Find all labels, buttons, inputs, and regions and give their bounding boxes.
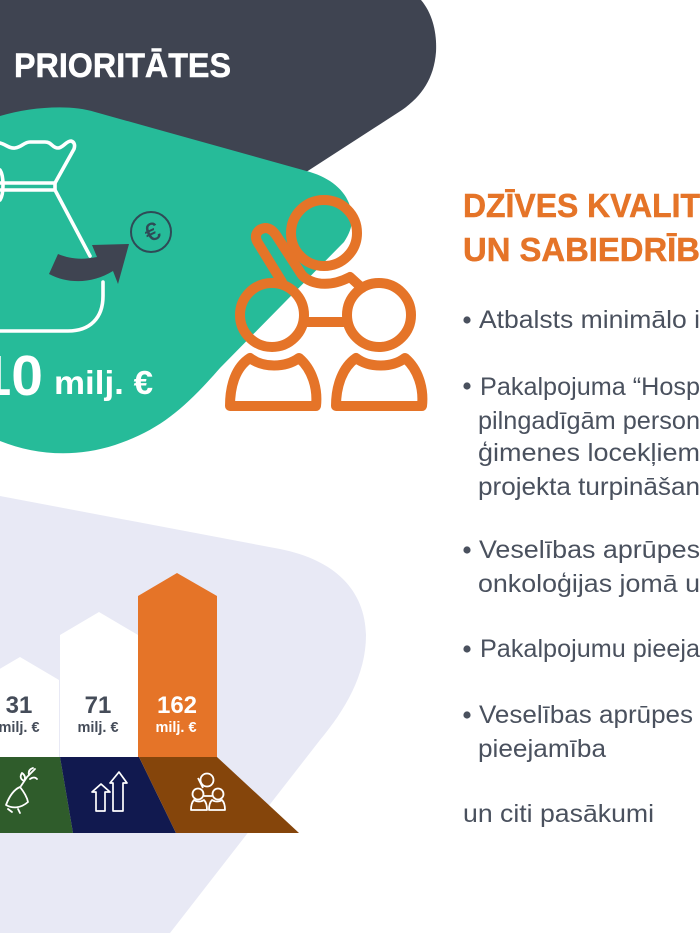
bar: 162 milj. €: milj. €	[155, 720, 197, 736]
bullet list: projekta turpināšan	[478, 473, 700, 501]
icon: euro coin	[131, 212, 171, 252]
bar: 162 milj. €: 162	[157, 692, 197, 719]
bullet list: un citi pasākumi	[463, 800, 654, 828]
bullet list: ģimenes locekļiem	[478, 439, 700, 467]
bullet list: Pakalpojuma “Hosp	[480, 373, 700, 401]
funding amount	[0, 344, 153, 408]
bar: 31 milj. €: 31	[6, 692, 32, 719]
base segment: brown with people icon	[139, 757, 299, 833]
panel: lavender chart background	[0, 496, 366, 933]
bullet list: Atbalsts minimālo i	[479, 306, 700, 334]
heading: life quality: UN SABIEDRĪB	[463, 231, 700, 268]
icon: euro coin: €	[140, 217, 165, 248]
icon: curved arrow	[49, 244, 129, 284]
icon: orange people group	[230, 200, 422, 406]
bullet list: onkoloģijas jomā u	[478, 570, 700, 598]
panel: dark header shape	[0, 0, 436, 190]
base segment: green with plug icon	[0, 757, 73, 833]
base segment: navy with arrows icon	[60, 757, 176, 833]
bar: 31 milj. €	[0, 657, 59, 757]
funding amount: milj. €	[54, 364, 153, 401]
bar: 71 milj. €: milj. €	[77, 720, 119, 736]
bullet list: pieejamība	[478, 735, 606, 763]
icon: money bag	[0, 141, 103, 331]
bar: 71 milj. €: 71	[85, 692, 111, 719]
bar: 162 milj. €	[138, 573, 217, 757]
bullet list: Veselības aprūpes	[479, 536, 700, 564]
bullet list: Pakalpojumu pieeja	[480, 635, 700, 663]
bullet list	[463, 306, 700, 828]
heading: life quality	[463, 187, 700, 268]
heading: PRIORITĀTES: PRIORITĀTES	[14, 47, 231, 85]
bar: 71 milj. €	[60, 612, 138, 757]
bullet list: Veselības aprūpes	[479, 701, 693, 729]
panel: green funding shape	[0, 107, 352, 453]
bullet list: pilngadīgām person	[478, 407, 700, 435]
